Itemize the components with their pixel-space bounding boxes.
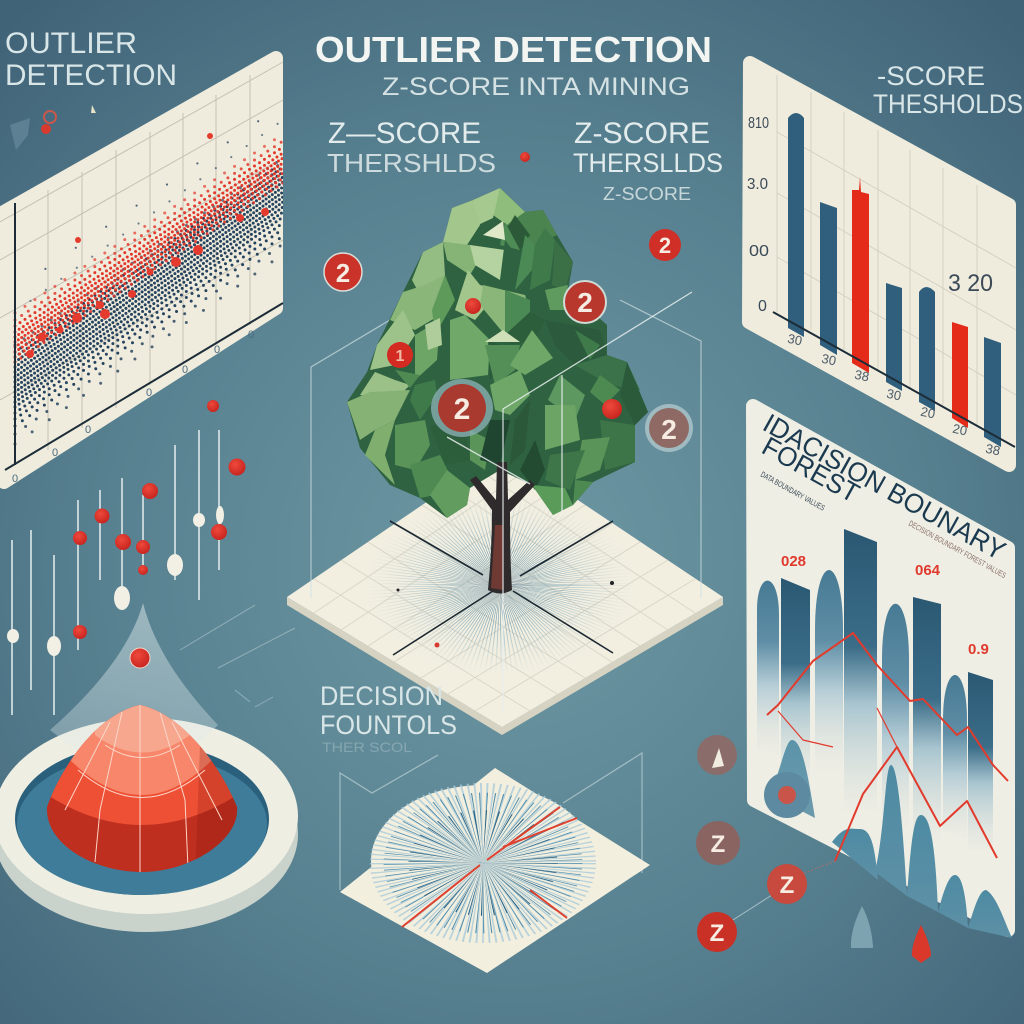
scatter axis tick labels: 0 bbox=[52, 447, 58, 459]
ring with red cone bbox=[0, 603, 298, 932]
x axis tick labels: 38 bbox=[984, 441, 1002, 458]
panel title: decision boundary forest: IDACISION BOUNARY bbox=[758, 408, 1011, 566]
badge: z top right bbox=[649, 229, 681, 261]
badge: z left bbox=[324, 253, 362, 291]
badge: z right: 2 bbox=[661, 414, 677, 445]
scatter points: navy cluster bbox=[15, 158, 283, 444]
heading: decision fountols: THER SCOL bbox=[322, 739, 412, 755]
heading: z-score thresholds top right: -SCORE bbox=[877, 61, 985, 91]
small cone icons bbox=[851, 906, 931, 963]
y axis tick labels: 3.0 bbox=[747, 176, 768, 193]
heading: decision fountols bbox=[320, 681, 457, 755]
scatter axis tick labels: 0 bbox=[12, 473, 18, 485]
inner pool bbox=[15, 743, 269, 895]
scatter axis tick labels: 0 bbox=[146, 387, 152, 399]
badge: small one on tree: 1 bbox=[396, 348, 405, 365]
y axis tick labels: 810 bbox=[748, 115, 769, 132]
x axis tick labels: 20 bbox=[951, 421, 969, 438]
badge: small one on tree bbox=[387, 342, 413, 368]
panel: bar chart bbox=[747, 63, 1016, 465]
y axis tick labels bbox=[747, 115, 769, 315]
x axis tick labels: 20 bbox=[919, 404, 937, 421]
scatter axis tick labels: 0 bbox=[248, 329, 254, 341]
panel: scatter plot bbox=[0, 58, 283, 485]
title: OUTLIER DETECTION bbox=[315, 29, 712, 70]
value labels: 064 bbox=[915, 562, 941, 579]
panel title: decision boundary forest: DATA BOUNDARY VALUES bbox=[759, 470, 826, 513]
panel: decision boundary bbox=[753, 406, 1012, 938]
badge: z centre bubble bbox=[431, 379, 493, 437]
cone apex ball bbox=[130, 648, 150, 668]
heading: z-score thresholds left bbox=[327, 117, 496, 178]
y axis tick labels: 0 bbox=[758, 298, 767, 315]
faint background strokes lower left bbox=[180, 605, 295, 707]
floor axes bbox=[390, 521, 613, 655]
x axis tick labels: 30 bbox=[820, 351, 838, 368]
scatter points: red cluster bbox=[15, 134, 283, 362]
glass lines around radial panel bbox=[340, 753, 642, 890]
badge: z on tree bbox=[564, 281, 606, 323]
white ring top bbox=[0, 718, 298, 914]
panel title: decision boundary forest: FOREST bbox=[757, 431, 864, 509]
y axis tick labels: 00 bbox=[749, 243, 769, 260]
red cone bbox=[46, 705, 238, 872]
bar chart axis bbox=[773, 312, 1015, 447]
floor grid bbox=[314, 468, 695, 711]
trunk and branches bbox=[470, 462, 535, 594]
lower mountains bbox=[770, 740, 1012, 938]
x axis tick labels bbox=[786, 331, 1002, 458]
x axis tick labels: 38 bbox=[853, 367, 871, 384]
paper backing under burst bbox=[371, 785, 595, 937]
panel: radial lines bbox=[340, 768, 650, 973]
heading: outlier detection left: OUTLIER bbox=[5, 27, 137, 60]
heading: z-score thresholds right bbox=[573, 117, 723, 204]
floor dots bbox=[396, 581, 614, 648]
tall bars bbox=[757, 529, 993, 850]
bars bbox=[788, 113, 1001, 447]
heading: decision fountols: FOUNTOLS bbox=[320, 710, 457, 740]
badge: z top right: 2 bbox=[659, 233, 671, 258]
heading: outlier detection left: DETECTION bbox=[5, 59, 177, 92]
subtitle: Z-SCORE INTA MINING bbox=[382, 73, 690, 101]
glass box back lines bbox=[311, 300, 701, 598]
badges: lower right chain: Z bbox=[710, 920, 724, 947]
bar chart value label: 3 20 bbox=[948, 270, 993, 297]
red dots on tree bbox=[465, 152, 622, 419]
scatter axes bbox=[5, 203, 283, 470]
scatter axis tick labels: 0 bbox=[182, 364, 188, 376]
scatter axis tick labels: 0 bbox=[214, 344, 220, 356]
floor panel bbox=[287, 450, 723, 735]
heading: z-score thresholds right: Z-SCORE bbox=[603, 184, 691, 204]
radial burst bbox=[426, 823, 540, 903]
canopy bbox=[347, 188, 648, 518]
glass box front lines bbox=[447, 292, 692, 712]
floor radial lines bbox=[432, 540, 568, 630]
heading: z-score thresholds left: Z—SCORE bbox=[328, 117, 481, 150]
x axis tick labels: 30 bbox=[786, 331, 804, 348]
badges: lower right chain bbox=[696, 735, 835, 952]
heading: z-score thresholds top right bbox=[873, 61, 1023, 119]
heading: decision fountols: DECISION bbox=[320, 681, 443, 711]
tree bbox=[347, 188, 648, 594]
outlier red rays bbox=[402, 807, 577, 927]
boundary curves bbox=[767, 633, 1008, 861]
badge: z on tree: 2 bbox=[577, 287, 593, 318]
decoration: small icon top left bbox=[10, 105, 96, 150]
heading: z-score thresholds left: THERSHLDS bbox=[327, 148, 496, 178]
scatter axis tick labels: 0 bbox=[85, 424, 91, 436]
ring side bbox=[0, 736, 298, 932]
badge: z right bbox=[645, 404, 693, 452]
scatter axis tick labels bbox=[12, 329, 254, 485]
badges: lower right chain: Z bbox=[711, 831, 725, 858]
glass cone bbox=[50, 603, 218, 800]
value labels: 028 bbox=[781, 553, 806, 570]
badge: z left: 2 bbox=[336, 258, 350, 288]
badge: z centre bubble: 2 bbox=[454, 393, 470, 426]
badges: lower right chain: Z bbox=[780, 872, 794, 899]
value labels: 0.9 bbox=[968, 641, 989, 658]
value labels bbox=[781, 553, 989, 658]
x axis tick labels: 30 bbox=[885, 386, 903, 403]
pin chart bbox=[7, 400, 246, 715]
heading: outlier detection left bbox=[5, 27, 177, 92]
heading: z-score thresholds right: THERSLLDS bbox=[573, 148, 723, 178]
heading: z-score thresholds right: Z-SCORE bbox=[574, 117, 710, 150]
